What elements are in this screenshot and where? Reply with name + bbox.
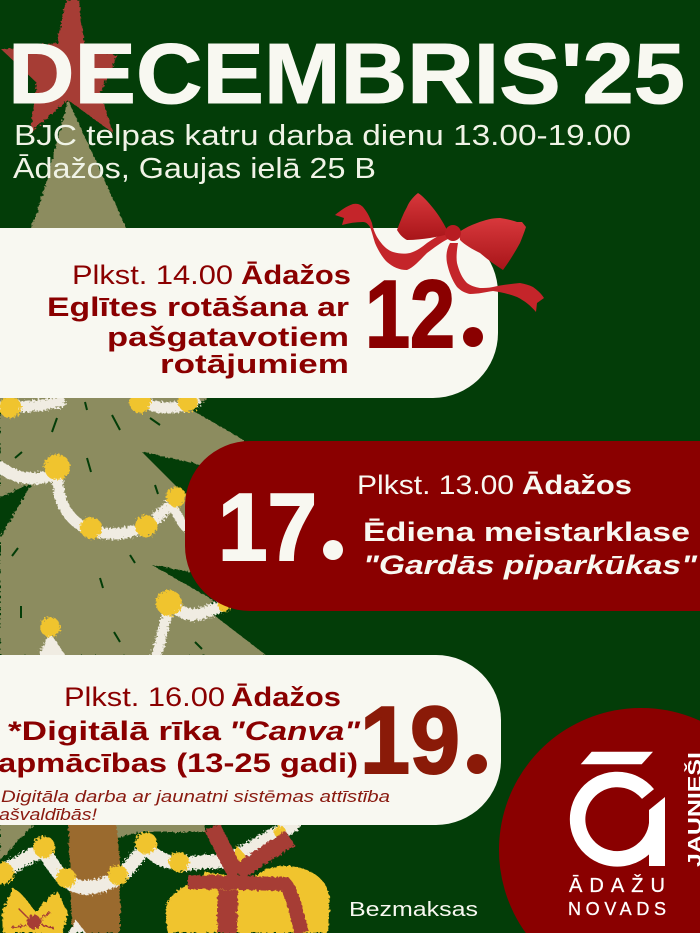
illustration: tree middle section xyxy=(0,394,267,656)
logo wordmark: NOVADS xyxy=(568,899,666,919)
event 17 time: Ādažos xyxy=(522,470,632,500)
event 12 description: rotājumiem xyxy=(160,349,349,379)
event 12 description xyxy=(47,292,350,379)
event 17 time xyxy=(357,470,632,500)
logo wordmark: ĀDAŽU xyxy=(569,874,665,897)
illustration: bottom garland xyxy=(0,825,293,888)
event 17 description xyxy=(363,517,698,580)
panel: event 12 xyxy=(0,228,498,398)
event 12 description: pašgatavotiem xyxy=(107,322,349,352)
illustration: yellow garland lights xyxy=(0,391,230,637)
event 17 description: Ēdiena meistarklase xyxy=(363,517,690,547)
trunk xyxy=(68,820,120,933)
icon: logo letter a with macron xyxy=(578,752,665,866)
illustration: top garland strands xyxy=(0,402,222,656)
logo badge xyxy=(499,708,700,933)
event 19 time xyxy=(64,682,341,712)
event 19 time: Ādažos xyxy=(231,682,341,712)
event 19 description: *Digitālā rīka xyxy=(8,716,222,746)
event 19 description xyxy=(0,716,361,778)
subtitle xyxy=(13,120,631,185)
illustration: bottom tree remnant xyxy=(0,820,205,933)
panel: event 19 xyxy=(0,655,501,825)
event 17 time: Plkst. 13.00 xyxy=(357,470,514,500)
event 12 date: 12 xyxy=(365,261,455,368)
event 12 time xyxy=(72,260,351,290)
event 17 date: 17 xyxy=(218,474,317,581)
event 19 date: 19 xyxy=(360,687,460,794)
icon: red ribbon bow xyxy=(335,193,544,312)
illustration: tree top section xyxy=(30,100,128,232)
event 19 description: "Canva" xyxy=(229,716,361,746)
event 12 time: Plkst. 14.00 xyxy=(72,260,233,290)
event 19 footnote xyxy=(0,788,390,824)
event 19 footnote: ašvaldībās! xyxy=(0,806,97,824)
subtitle: Ādažos, Gaujas ielā 25 B xyxy=(13,153,376,185)
panel: event 17 xyxy=(185,441,700,611)
event 19 footnote: Digitāla darba ar jaunatni sistēmas attīstība xyxy=(1,788,390,806)
event 19 description: apmācības (13-25 gadi) xyxy=(0,748,358,778)
icon: star on tree top xyxy=(2,0,118,133)
event 19 time: Plkst. 16.00 xyxy=(64,682,225,712)
title: DECEMBRIS'25 xyxy=(8,27,685,122)
icon: gift box xyxy=(166,827,330,933)
event 12 description: Eglītes rotāšana ar xyxy=(47,292,350,322)
speckles xyxy=(12,402,202,649)
icon: small yellow bow xyxy=(2,888,86,933)
event 17 description: "Gardās piparkūkas" xyxy=(363,550,698,580)
logo wordmark xyxy=(568,874,666,919)
subtitle: BJC telpas katru darba dienu 13.00-19.00 xyxy=(14,120,631,152)
event 12 time: Ādažos xyxy=(241,260,351,290)
note: free of charge: Bezmaksas xyxy=(349,899,478,921)
